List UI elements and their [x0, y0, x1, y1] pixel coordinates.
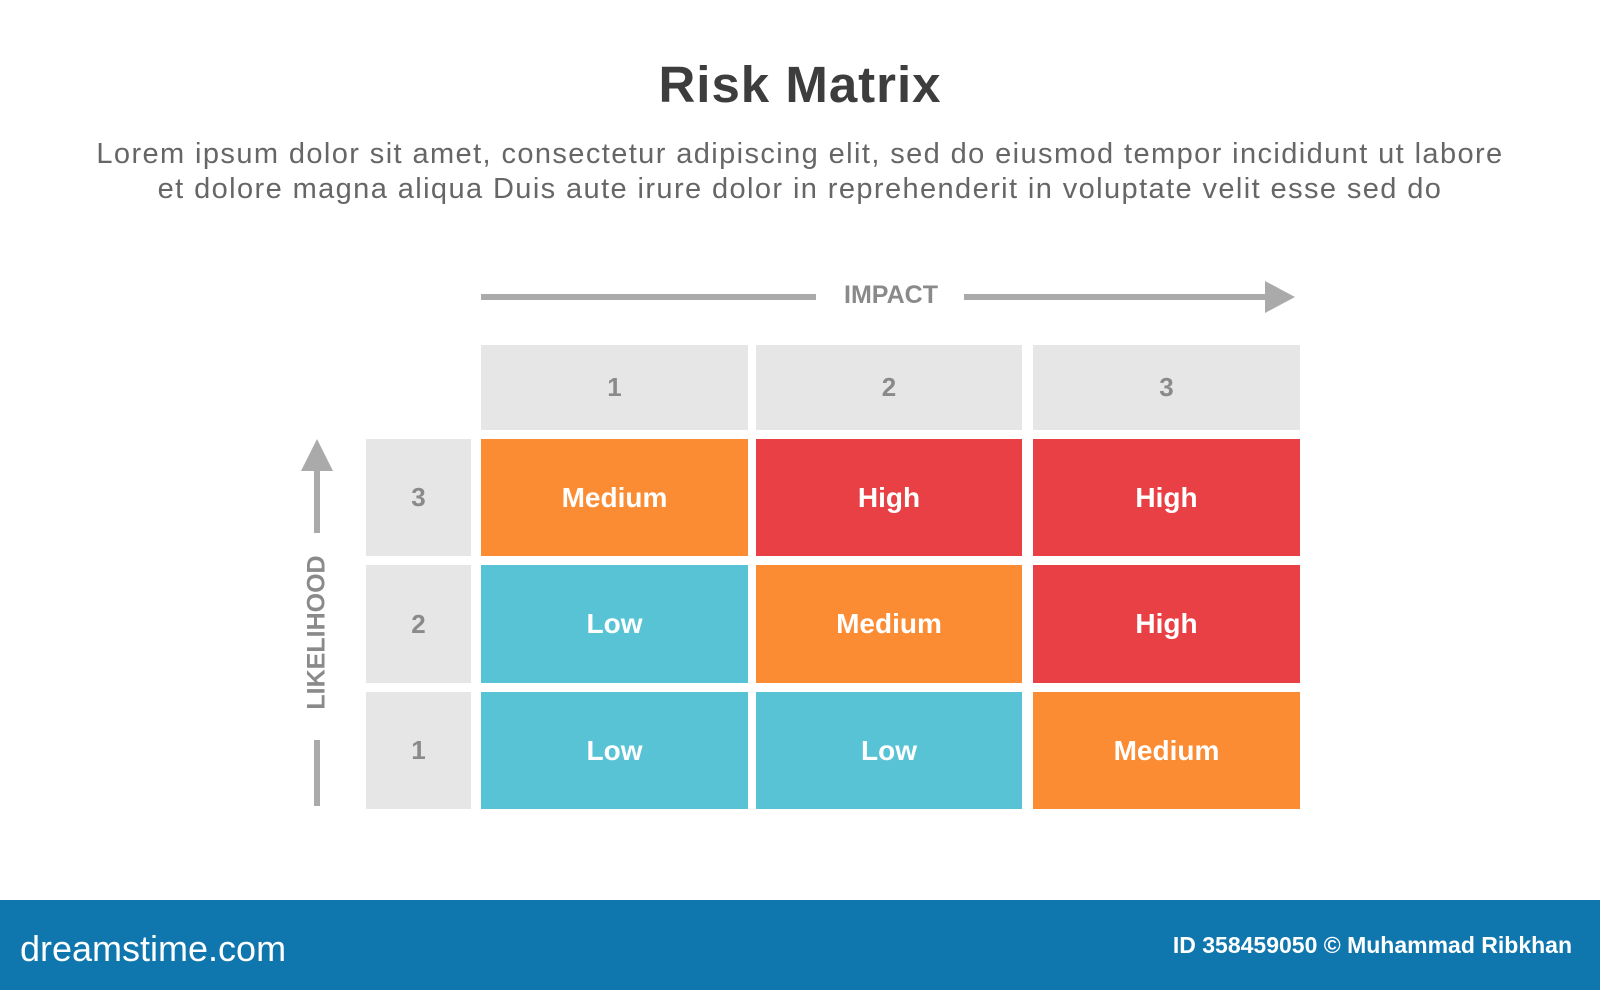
impact header 1: 1 [607, 372, 622, 402]
footer bar [0, 900, 1600, 990]
cell 1-1 [481, 692, 748, 809]
matrix grid [366, 345, 1300, 809]
cell 3-2: High [858, 482, 920, 512]
subtitle: et dolore magna aliqua Duis aute irure dolor in reprehenderit in voluptate velit esse sed do [158, 173, 1442, 205]
cell 2-1 [481, 565, 748, 683]
impact header 2 [756, 345, 1022, 430]
cell 3-3 [1033, 439, 1300, 556]
title: Risk Matrix [658, 56, 942, 113]
cell 2-2: Medium [836, 608, 942, 639]
impact header 2: 2 [882, 372, 896, 402]
cell 3-1: Medium [562, 482, 667, 512]
likelihood header 3: 3 [411, 482, 426, 512]
likelihood header 3 [366, 439, 471, 556]
subtitle: Lorem ipsum dolor sit amet, consectetur adipiscing elit, sed do eiusmod tempor incididunt ut labore [96, 138, 1504, 170]
cell 1-2: Low [861, 734, 917, 766]
cell 2-3: High [1135, 608, 1198, 639]
subtitle [96, 138, 1504, 205]
label: likelihood: LIKELIHOOD [302, 555, 330, 710]
label: impact: IMPACT [844, 281, 938, 309]
likelihood header 2: 2 [411, 608, 426, 638]
cell 1-3: Medium [1114, 734, 1219, 766]
cell 2-1: Low [586, 608, 642, 639]
impact header 1 [481, 345, 748, 430]
impact header 3 [1033, 345, 1300, 430]
cell 2-2 [756, 565, 1022, 683]
likelihood header 1: 1 [411, 735, 426, 765]
arrow: impact [481, 281, 1295, 313]
cell 3-3: High [1135, 482, 1198, 512]
cell 1-2 [756, 692, 1022, 809]
cell 1-3 [1033, 692, 1300, 809]
likelihood header 1 [366, 692, 471, 809]
footer logo: dreamstime.com [20, 928, 286, 969]
impact header 3: 3 [1159, 372, 1174, 402]
cell 1-1: Low [586, 734, 642, 766]
footer credit: ID 358459050 © Muhammad Ribkhan [1173, 932, 1572, 958]
arrow: likelihood [301, 439, 333, 806]
cell 2-3 [1033, 565, 1300, 683]
cell 3-1 [481, 439, 748, 556]
cell 3-2 [756, 439, 1022, 556]
likelihood header 2 [366, 565, 471, 683]
